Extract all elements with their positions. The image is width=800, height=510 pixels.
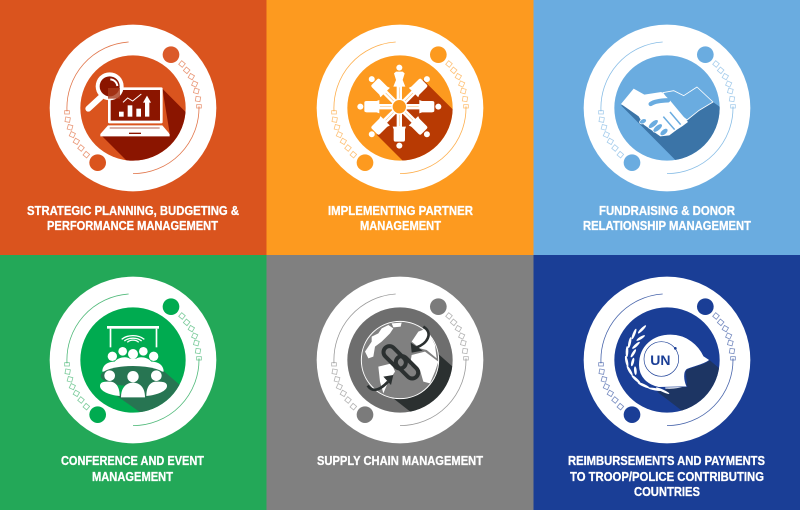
icon: meeting room <box>100 326 167 397</box>
laurel wreath <box>624 324 682 395</box>
panel: implementing partner <box>266 0 534 255</box>
badge: strategic planning <box>50 25 216 191</box>
icon: handshake <box>621 87 713 137</box>
heading: reimbursements <box>568 453 765 499</box>
badge: implementing partner <box>317 25 483 191</box>
icon: globe and chain <box>361 321 439 399</box>
heading: strategic planning <box>27 203 239 233</box>
icon: UN helmet and laurel: UN <box>650 352 670 368</box>
heading: strategic planning: STRATEGIC PLANNING, BUDGETING & <box>27 203 239 218</box>
icon: laptop and magnifier <box>88 72 170 136</box>
panel: supply chain <box>266 255 534 510</box>
heading: fundraising <box>583 203 751 233</box>
heading: conference: MANAGEMENT <box>92 469 173 484</box>
heading: conference: CONFERENCE AND EVENT <box>61 453 204 468</box>
badge: supply chain <box>317 277 483 443</box>
heading: strategic planning: PERFORMANCE MANAGEMENT <box>47 218 218 233</box>
heading: reimbursements: TO TROOP/POLICE CONTRIBUTING <box>570 469 764 484</box>
icon: people around a hub <box>357 65 441 149</box>
heading: reimbursements: REIMBURSEMENTS AND PAYMENTS <box>568 453 765 468</box>
badge: conference <box>50 277 216 443</box>
heading: fundraising: RELATIONSHIP MANAGEMENT <box>583 218 751 233</box>
heading: supply chain: SUPPLY CHAIN MANAGEMENT <box>317 453 483 468</box>
panel: strategic planning <box>0 0 266 255</box>
panel: conference <box>0 255 266 510</box>
heading: implementing partner: MANAGEMENT <box>360 218 441 233</box>
heading: implementing partner: IMPLEMENTING PARTNER <box>328 203 474 218</box>
badge: fundraising <box>584 25 750 191</box>
panel: reimbursements <box>534 255 800 510</box>
panel: fundraising <box>534 0 800 255</box>
heading: reimbursements: COUNTRIES <box>634 484 700 499</box>
badge: reimbursements <box>584 277 750 443</box>
heading: implementing partner <box>328 203 474 233</box>
heading: fundraising: FUNDRAISING & DONOR <box>599 203 736 218</box>
icon: UN helmet and laurel <box>624 324 710 395</box>
heading: conference <box>61 453 204 484</box>
